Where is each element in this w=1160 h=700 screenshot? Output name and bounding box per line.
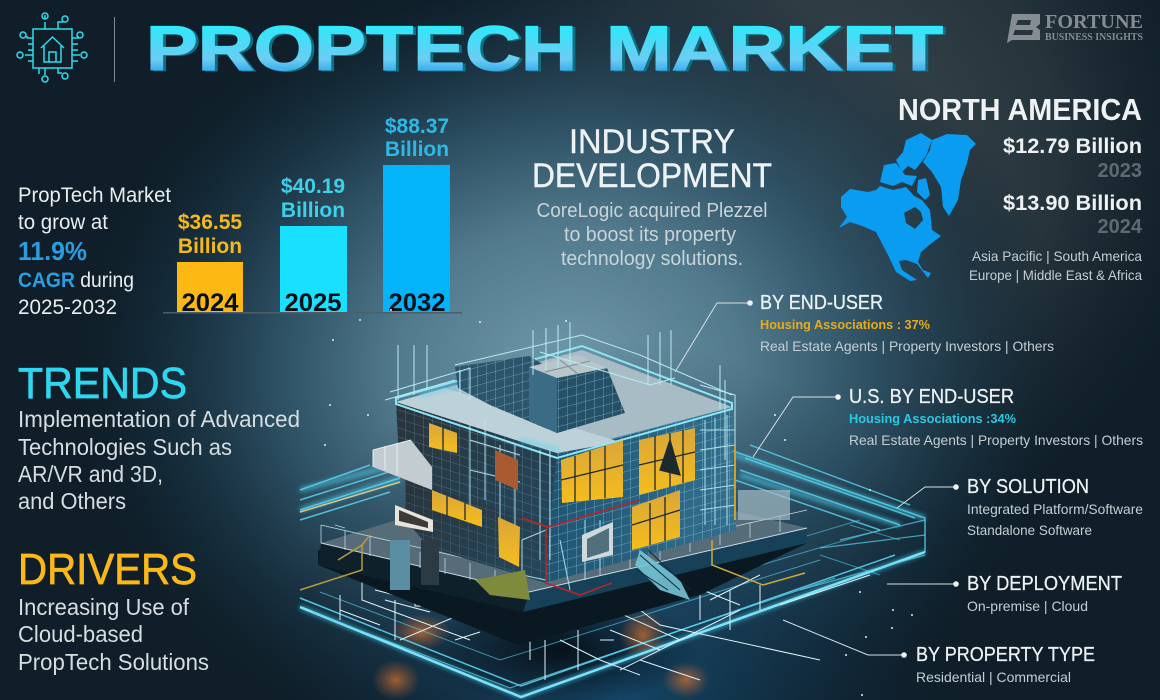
text block: CAGR growth <box>18 184 171 319</box>
text block: trends <box>18 406 300 514</box>
panel: North America: NORTH AMERICA <box>898 92 1142 127</box>
bar 2032 <box>383 115 450 317</box>
panel: North America: $12.79 Billion <box>1003 135 1142 158</box>
panel: North America: Asia Pacific | South America <box>972 248 1142 264</box>
callout: by deployment: BY DEPLOYMENT <box>967 573 1122 595</box>
text block: drivers <box>18 594 209 675</box>
title: MARKET <box>609 15 946 85</box>
callout: by solution: Standalone Software <box>967 522 1092 538</box>
text block: CAGR growth: to grow at <box>18 211 108 234</box>
underfloor wiring <box>340 570 870 680</box>
panel: North America: $13.90 Billion <box>1003 192 1142 215</box>
callout: by deployment: On-premise | Cloud <box>967 598 1088 614</box>
bar chart: market size <box>163 115 462 317</box>
panel: North America: 2023 <box>1098 160 1142 182</box>
callout: by solution: BY SOLUTION <box>967 476 1089 498</box>
callout: by property type <box>783 620 1095 685</box>
bar 2025: Billion <box>281 199 345 222</box>
icon: smart home chip <box>17 13 87 82</box>
text block: CAGR growth: CAGR during <box>18 269 134 292</box>
callout: U.S. by end-user: Real Estate Agents | Property Investors | Others <box>849 432 1143 448</box>
blue wall framing <box>470 415 735 590</box>
logo: Fortune Business Insights <box>1007 11 1143 43</box>
panel: North America <box>898 92 1143 283</box>
callout: by deployment <box>887 573 1122 614</box>
heading: drivers <box>18 545 209 675</box>
callout: by solution <box>897 476 1143 538</box>
icon: North America map <box>839 133 976 281</box>
heading and text: industry development <box>532 123 772 270</box>
text block: drivers: Increasing Use of <box>18 594 190 620</box>
heading and text: industry development: INDUSTRY <box>569 123 735 161</box>
windows <box>429 423 695 567</box>
floor plan grid glow <box>300 455 925 697</box>
callout: by solution: Integrated Platform/Software <box>967 501 1143 517</box>
text block: drivers: Cloud-based <box>18 621 143 647</box>
penthouse <box>455 356 625 433</box>
side structures: balcony, screens and red piping <box>300 440 805 600</box>
title <box>146 14 946 85</box>
text block: CAGR growth: 2025-2032 <box>18 296 117 319</box>
heading: trends <box>18 359 300 514</box>
bar 2024: 2024 <box>182 289 239 317</box>
title: PROPTECH <box>146 14 577 84</box>
heading and text: industry development: CoreLogic acquired Plezzel <box>536 200 768 222</box>
bar 2024: $36.55 <box>178 211 242 234</box>
callout: by property type: BY PROPERTY TYPE <box>916 644 1095 666</box>
glowing particles <box>324 309 913 696</box>
bar 2024: Billion <box>178 235 242 258</box>
floor plan grid <box>300 445 925 697</box>
heading and text: industry development: DEVELOPMENT <box>532 157 772 195</box>
bar 2025 <box>280 175 347 317</box>
heading: drivers: DRIVERS <box>18 545 197 594</box>
callout: U.S. by end-user <box>753 386 1143 457</box>
bar 2024 <box>177 211 243 317</box>
bar 2032: Billion <box>385 138 449 161</box>
callout: by end-user: BY END-USER <box>760 292 883 314</box>
roof <box>396 350 732 453</box>
title: MARKET <box>606 14 943 84</box>
heading and text: industry development: technology solutions. <box>561 248 743 270</box>
upper floor walls <box>396 402 557 525</box>
text block: drivers: PropTech Solutions <box>18 649 209 675</box>
heading: trends: TRENDS <box>18 359 187 408</box>
callout: by end-user: Real Estate Agents | Property Investors | Others <box>760 338 1054 354</box>
title: PROPTECH <box>149 15 580 85</box>
text block: CAGR growth: PropTech Market <box>18 184 171 207</box>
rooftop railings <box>385 322 735 460</box>
building lower floor <box>405 470 550 583</box>
bar 2025: 2025 <box>284 289 342 317</box>
divider <box>114 17 115 82</box>
callout: by end-user <box>675 292 1054 372</box>
heading and text: industry development: to boost its property <box>564 224 736 246</box>
text block: trends: Implementation of Advanced <box>18 406 300 432</box>
text block: CAGR growth: 11.9% <box>18 236 87 266</box>
bar 2025: $40.19 <box>281 175 345 198</box>
illustration: isometric smart building <box>300 309 925 700</box>
platform <box>318 528 807 645</box>
logo: Fortune Business Insights: BUSINESS INSIGHTS <box>1045 32 1143 43</box>
text block: trends: and Others <box>18 488 126 514</box>
text block: trends: AR/VR and 3D, <box>18 461 163 487</box>
bar 2032: $88.37 <box>385 115 449 138</box>
panel: North America: Europe | Middle East & Africa <box>969 267 1142 283</box>
callout: U.S. by end-user: U.S. BY END-USER <box>849 386 1014 408</box>
logo: Fortune Business Insights: FORTUNE <box>1045 11 1143 33</box>
reflections <box>372 595 710 700</box>
text block: trends: Technologies Such as <box>18 434 232 460</box>
bar 2032: 2032 <box>388 289 446 317</box>
callout: U.S. by end-user: Housing Associations :34% <box>849 411 1016 426</box>
panel: North America: 2024 <box>1098 216 1143 238</box>
callout: by end-user: Housing Associations : 37% <box>760 317 930 332</box>
window mullions <box>443 428 695 545</box>
callout: by property type: Residential | Commercial <box>916 669 1071 685</box>
